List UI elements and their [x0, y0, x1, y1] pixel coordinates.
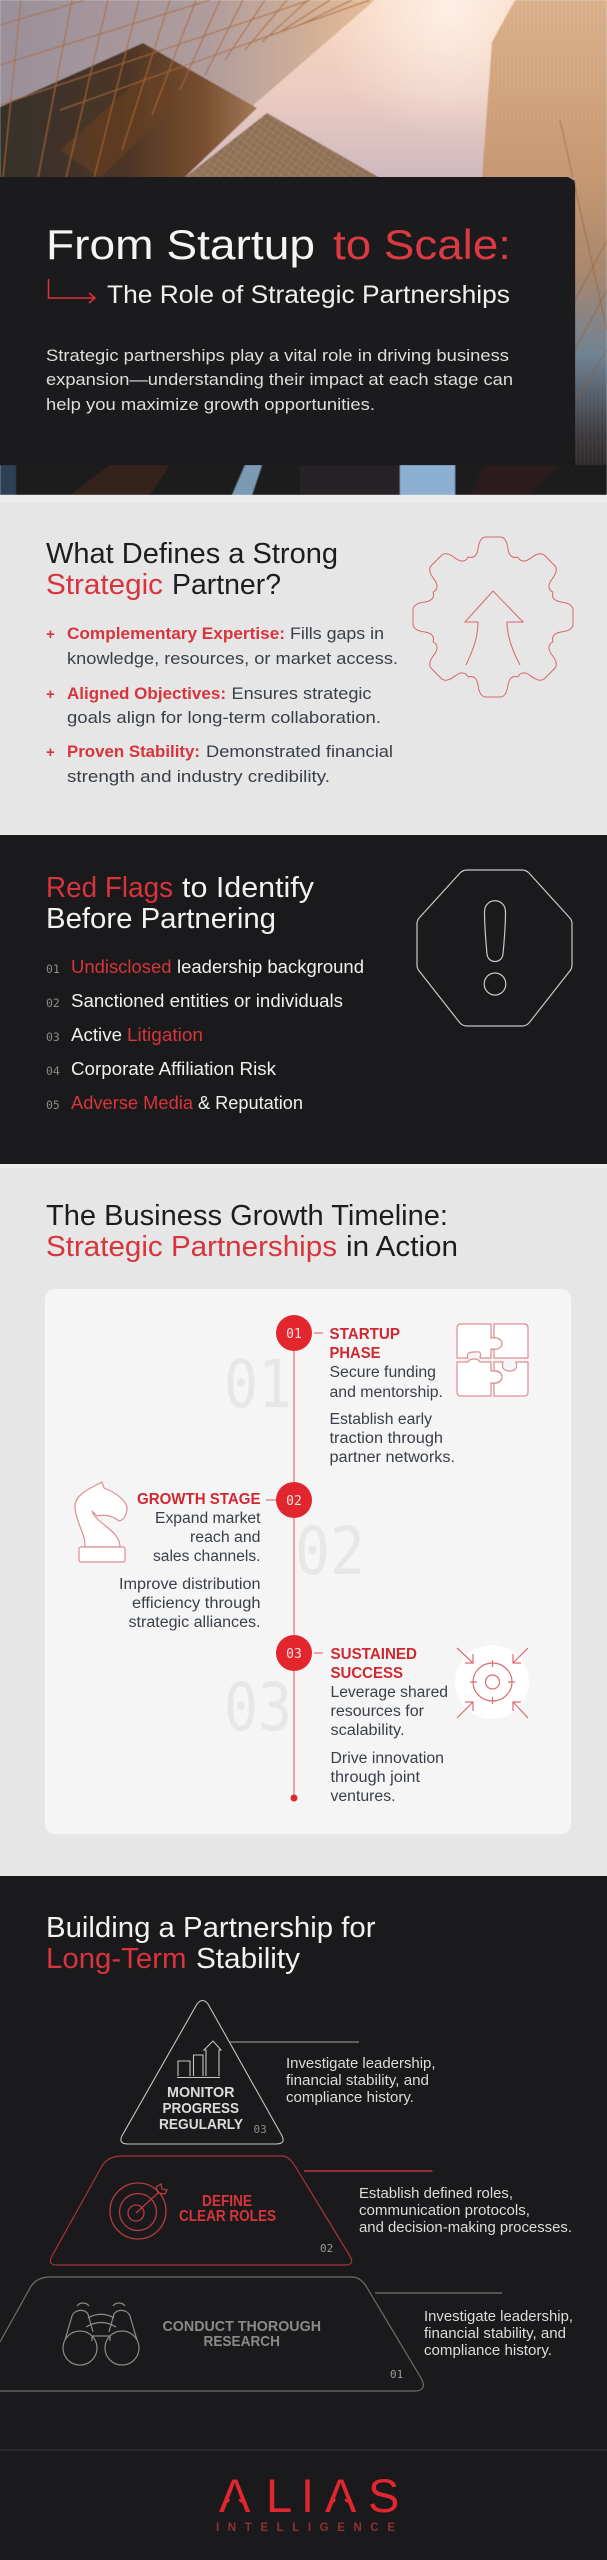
red flag list: Adverse Media — [71, 1093, 194, 1113]
intro text: Strategic partnerships play a vital role in driving business — [46, 346, 509, 365]
step 03: SUSTAINED — [330, 1646, 417, 1663]
step 02: Improve distribution — [119, 1576, 260, 1593]
panel: strong strategic partner — [0, 503, 607, 834]
ghost numbers: 03 — [224, 1669, 292, 1746]
tier 03: monitor progress: PROGRESS — [162, 2100, 239, 2117]
checklist: + — [46, 686, 55, 703]
step 03: ventures. — [330, 1788, 396, 1805]
checklist: + — [46, 744, 55, 761]
logo: Alias Intelligence: INTELLIGENCE — [216, 2522, 395, 2534]
heading — [46, 872, 315, 935]
icon: puzzle — [457, 1324, 528, 1396]
tier 01: conduct thorough research — [0, 2277, 573, 2391]
step 02 — [119, 1482, 312, 1631]
heading: Building a Partnership for — [46, 1912, 376, 1944]
timeline card — [45, 1289, 571, 1834]
step 01: partner networks. — [330, 1449, 455, 1466]
tier 03: monitor progress: 03 — [254, 2123, 267, 2136]
icon: chess knight — [75, 1482, 127, 1562]
heading: Before Partnering — [46, 903, 276, 935]
heading: Stability — [196, 1943, 301, 1975]
icon: target with inward arrows — [455, 1645, 529, 1719]
checklist: Ensures strategic — [232, 684, 372, 703]
red flag list: 03 — [46, 1030, 60, 1044]
tier 03: monitor progress: MONITOR — [167, 2084, 235, 2101]
step 03: through joint — [330, 1769, 421, 1786]
red flag list: 05 — [46, 1098, 60, 1112]
tier 03: monitor progress: financial stability, and — [286, 2073, 429, 2089]
red flag list: Corporate Affiliation Risk — [71, 1059, 277, 1079]
step 03: Leverage shared — [330, 1684, 448, 1701]
tier 02: define clear roles — [50, 2156, 572, 2265]
heading — [46, 1200, 458, 1263]
step 03: SUCCESS — [330, 1665, 403, 1682]
step 01: Secure funding — [330, 1364, 436, 1381]
ghost numbers — [224, 1346, 365, 1746]
tier 02: define clear roles: 02 — [320, 2242, 333, 2255]
heading — [46, 538, 338, 601]
title: From Startup — [46, 221, 315, 268]
step 01: Establish early — [330, 1411, 432, 1428]
end dot — [290, 1794, 298, 1802]
step 01: 01 — [286, 1327, 302, 1342]
icon: elbow arrow — [48, 279, 95, 303]
tier 01: conduct thorough research: financial stability, and — [424, 2326, 566, 2342]
tier 03: monitor progress — [121, 2000, 436, 2144]
tier 01: conduct thorough research: compliance history. — [424, 2343, 552, 2359]
hero card — [0, 177, 575, 465]
step 02: efficiency through — [132, 1595, 260, 1612]
icon: target with dart — [110, 2183, 167, 2239]
heading: What Defines a Strong — [46, 538, 338, 570]
heading — [46, 1912, 376, 1975]
red flag list: Undisclosed — [71, 957, 172, 977]
heading: in Action — [346, 1231, 458, 1263]
icon: binoculars — [63, 2303, 139, 2365]
heading: Red Flags — [46, 872, 173, 904]
red flag list: & Reputation — [198, 1093, 303, 1113]
step 03 — [276, 1635, 448, 1805]
step 02: reach and — [190, 1529, 260, 1546]
tier 03: monitor progress: REGULARLY — [159, 2116, 243, 2133]
tier 02: define clear roles: DEFINE — [202, 2193, 252, 2210]
tier 02: define clear roles: Establish defined roles, — [359, 2186, 513, 2202]
step 02: GROWTH STAGE — [137, 1491, 260, 1508]
panel: business growth timeline — [0, 1168, 607, 1876]
step 01 — [276, 1315, 455, 1466]
intro text — [46, 346, 513, 414]
step 02: sales channels. — [153, 1548, 260, 1565]
step 01: and mentorship. — [330, 1384, 443, 1401]
red flag list: Sanctioned entities or individuals — [71, 991, 343, 1011]
panel: red flags — [0, 835, 607, 1164]
tier 01: conduct thorough research: Investigate leadership, — [424, 2309, 573, 2325]
checklist: Fills gaps in — [290, 624, 384, 643]
checklist: Complementary Expertise: — [67, 624, 285, 643]
checklist: strength and industry credibility. — [67, 767, 330, 786]
hero photo: skyscrapers — [0, 0, 607, 495]
red flag list: 02 — [46, 996, 60, 1010]
intro text: expansion—understanding their impact at each stage can — [46, 370, 513, 389]
ghost numbers: 02 — [295, 1513, 365, 1590]
checklist: Proven Stability: — [67, 742, 200, 761]
red flag list: Active — [71, 1025, 122, 1045]
checklist: Demonstrated financial — [206, 742, 393, 761]
tier 02: define clear roles: and decision-making processes. — [359, 2220, 572, 2236]
checklist: knowledge, resources, or market access. — [67, 649, 398, 668]
title: to Scale: — [333, 221, 511, 268]
step 02: strategic alliances. — [128, 1614, 260, 1631]
icon: gear with up arrow — [413, 537, 573, 697]
icon: warning octagon — [417, 870, 572, 1026]
checklist: Aligned Objectives: — [67, 684, 226, 703]
intro text: help you maximize growth opportunities. — [46, 395, 375, 414]
step 01: STARTUP — [330, 1326, 400, 1343]
red flag list: 04 — [46, 1064, 60, 1078]
step 03: 03 — [286, 1647, 302, 1662]
tier 02: define clear roles: CLEAR ROLES — [179, 2208, 276, 2225]
heading: Strategic Partnerships — [46, 1231, 337, 1263]
tier 02: define clear roles: communication protocols, — [359, 2203, 530, 2219]
step 02: Expand market — [155, 1510, 261, 1527]
red flag list: Litigation — [127, 1025, 203, 1045]
red flag list — [46, 957, 364, 1113]
tier 03: monitor progress: Investigate leadership, — [286, 2056, 436, 2072]
step 01: PHASE — [330, 1345, 380, 1362]
heading: to Identify — [182, 872, 315, 904]
logo: Alias Intelligence: ALIAS — [219, 2469, 399, 2522]
tier 01: conduct thorough research: CONDUCT THOROUGH — [162, 2318, 321, 2335]
red flag list: 01 — [46, 962, 60, 976]
title — [46, 221, 511, 268]
heading: The Business Growth Timeline: — [46, 1200, 448, 1232]
ghost numbers: 01 — [224, 1346, 292, 1423]
panel: long-term stability — [0, 1876, 607, 2560]
checklist — [46, 624, 398, 786]
subtitle: The Role of Strategic Partnerships — [107, 281, 510, 309]
step 03: resources for — [330, 1703, 424, 1720]
step 02: 02 — [286, 1494, 302, 1509]
step 03: Drive innovation — [330, 1750, 444, 1767]
timeline line — [266, 1333, 323, 1798]
tier 03: monitor progress: compliance history. — [286, 2090, 414, 2106]
tier 01: conduct thorough research: 01 — [390, 2368, 403, 2381]
heading: Long-Term — [46, 1943, 186, 1975]
step 01: traction through — [330, 1430, 443, 1447]
heading: Partner? — [172, 569, 281, 601]
red flag list: leadership background — [177, 957, 364, 977]
tier 01: conduct thorough research: RESEARCH — [204, 2333, 280, 2350]
checklist: goals align for long-term collaboration. — [67, 708, 381, 727]
step 03: scalability. — [330, 1722, 404, 1739]
heading: Strategic — [46, 569, 163, 601]
icon: growth chart — [177, 2041, 221, 2078]
checklist: + — [46, 626, 55, 643]
